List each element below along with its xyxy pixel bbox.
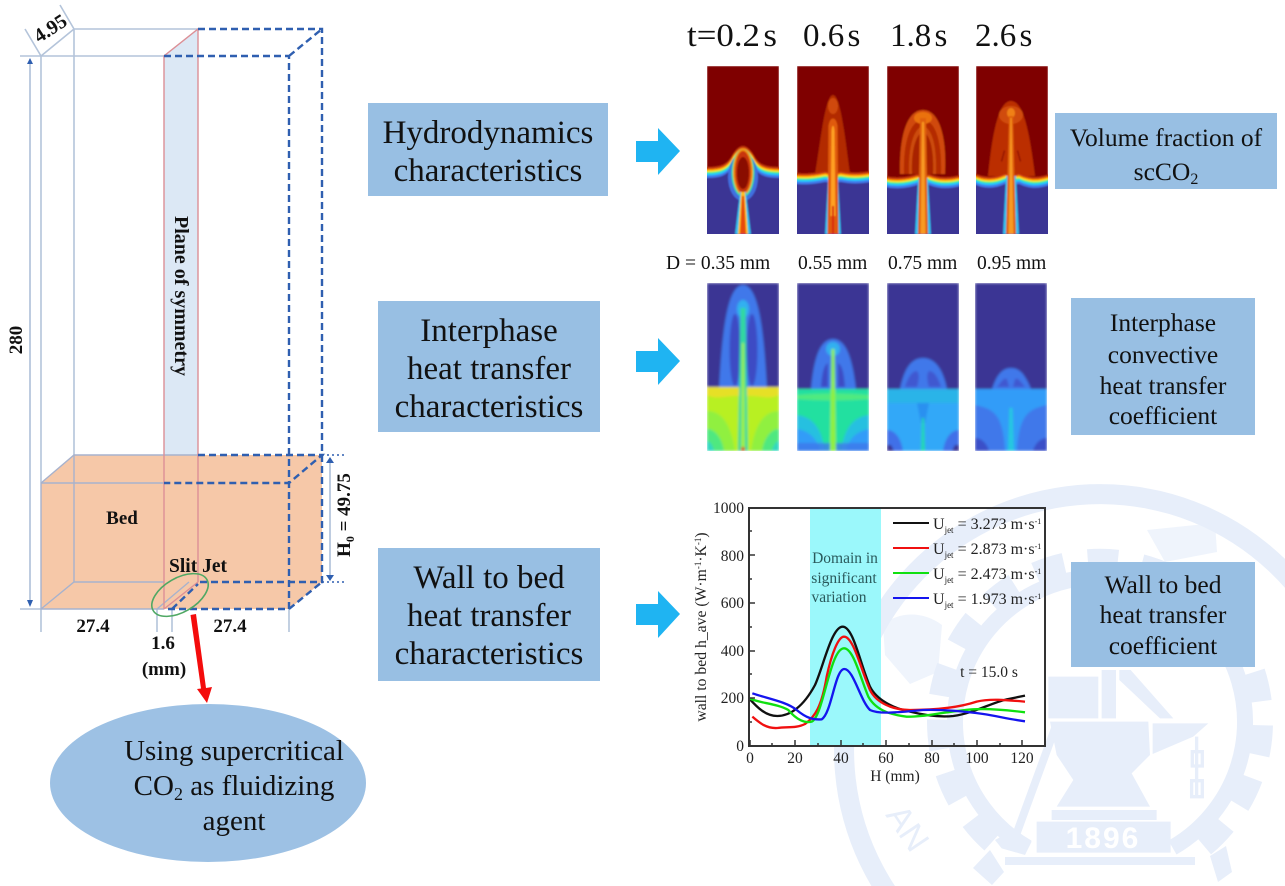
curves <box>749 627 1025 728</box>
axis labels: 1000 <box>713 500 744 517</box>
contour t=0.2 s <box>707 66 779 234</box>
dimension arrows <box>30 62 330 602</box>
heading: particle diameter labels <box>666 253 1046 274</box>
dimension labels: 0 <box>343 536 357 542</box>
domain annotation: variation <box>811 589 867 606</box>
axis labels: 80 <box>924 750 940 767</box>
axis labels: 400 <box>721 643 744 660</box>
legend <box>893 516 1041 610</box>
heading: time labels: t=0.2 s <box>687 18 777 54</box>
panel: volume fraction label <box>1055 113 1277 189</box>
panel: 3D fluidized bed geometry <box>6 5 357 680</box>
legend: = 2.873 m·s <box>954 541 1035 558</box>
axis labels: 200 <box>721 690 744 707</box>
axis labels: 0 <box>746 750 754 767</box>
legend: U <box>933 516 945 533</box>
legend: U <box>933 541 945 558</box>
contour D=0.75 mm <box>887 283 959 451</box>
heading: time labels <box>687 18 1032 54</box>
panel: Hydrodynamics characteristics: Hydrodynamics <box>383 115 593 151</box>
panel: Hydrodynamics characteristics <box>368 103 608 196</box>
axis labels: 800 <box>721 548 744 565</box>
red plane edges <box>164 29 198 609</box>
arrow: red to supercritical CO2 <box>190 614 212 703</box>
heading: particle diameter labels: 0.55 mm <box>798 253 867 274</box>
contour D=0.55 mm <box>797 283 869 451</box>
callout: supercritical CO2: CO <box>134 770 334 804</box>
watermark: university emblem: AN <box>878 798 936 859</box>
contour t=1.8 s <box>887 66 959 234</box>
dimension labels: 4.95 <box>30 10 71 48</box>
axis labels: 120 <box>1010 750 1034 767</box>
domain annotation: significant <box>811 570 877 587</box>
bed block <box>41 455 322 609</box>
legend: = 2.473 m·s <box>954 566 1035 583</box>
significant variation domain <box>810 508 881 746</box>
dimension labels <box>6 10 357 680</box>
panel: interphase coefficient label: Interphase <box>1110 308 1216 337</box>
axis labels: -1 <box>693 538 703 545</box>
light outline edges <box>20 5 289 632</box>
axis labels: 600 <box>721 595 744 612</box>
panel: interphase coefficient label: heat transfer <box>1100 371 1227 400</box>
axis labels: 20 <box>787 750 803 767</box>
watermark: university emblem: 1896 <box>1066 822 1140 855</box>
dimension labels: Plane of symmetry <box>170 216 192 376</box>
dimension labels: 27.4 <box>213 616 247 637</box>
panel: interphase coefficient label: convective <box>1108 340 1218 369</box>
panel: wall to bed coefficient label <box>1071 562 1255 667</box>
heading: particle diameter labels: 0.95 mm <box>977 253 1046 274</box>
axis labels: -1 <box>693 562 703 569</box>
dimension labels: 27.4 <box>76 616 110 637</box>
slit jet ring <box>145 565 215 625</box>
legend: -1 <box>1035 567 1041 576</box>
dimension labels: Slit Jet <box>169 556 227 577</box>
dimension labels: 1.6 <box>151 633 175 654</box>
contour D=0.95 mm <box>975 283 1047 451</box>
panel: Wall to bed heat transfer characteristics <box>378 548 600 681</box>
dashed blue half-box <box>164 29 322 609</box>
legend: -1 <box>1035 517 1041 526</box>
panel: volume fraction label: scCO <box>1134 157 1198 188</box>
dimension labels: (mm) <box>142 659 186 680</box>
axis labels: 40 <box>833 750 849 767</box>
dimension labels: = 49.75 <box>334 473 355 536</box>
axis labels: H (mm) <box>870 768 920 785</box>
chart: volume fraction contours <box>705 66 1050 247</box>
arrow: wall to bed <box>636 591 680 638</box>
callout: supercritical CO2 <box>50 704 366 862</box>
callout: supercritical CO2: as fluidizing <box>183 770 334 802</box>
panel: Interphase heat transfer characteristics: characteristics <box>395 389 583 425</box>
heading: time labels: 2.6 s <box>975 18 1032 54</box>
heading: particle diameter labels: D = 0.35 mm <box>666 253 770 274</box>
panel: wall to bed coefficient label: heat transfer <box>1100 600 1227 629</box>
callout: supercritical CO2: Using supercritical <box>124 735 344 767</box>
panel: Interphase heat transfer characteristics: Interphase <box>420 313 558 349</box>
panel: Interphase heat transfer characteristics: heat transfer <box>407 351 571 387</box>
symmetry plane fill <box>164 29 198 455</box>
panel: Wall to bed heat transfer characteristics: characteristics <box>395 636 583 672</box>
heading: time labels: 1.8 s <box>890 18 947 54</box>
panel: wall to bed coefficient label: Wall to bed <box>1105 570 1222 599</box>
axis labels <box>693 500 1034 785</box>
legend: U <box>933 591 945 608</box>
dimension labels: H <box>334 542 355 557</box>
legend: jet <box>944 600 954 610</box>
axis labels: ·K <box>693 544 710 562</box>
panel: Interphase heat transfer characteristics <box>378 301 600 432</box>
legend: -1 <box>1035 542 1041 551</box>
axis labels: 100 <box>965 750 989 767</box>
panel: volume fraction label: Volume fraction of <box>1070 123 1263 152</box>
chart: heat transfer coefficient contours <box>707 283 1047 451</box>
dimension labels: 280 <box>6 326 27 354</box>
legend: jet <box>944 525 954 535</box>
panel: wall to bed coefficient label: coefficient <box>1109 631 1217 660</box>
arrow: hydrodynamics <box>636 128 680 175</box>
callout: supercritical CO2: agent <box>203 805 265 837</box>
axis labels: ) <box>693 532 710 538</box>
contour D=0.35 mm <box>707 283 779 451</box>
panel: Wall to bed heat transfer characteristics: heat transfer <box>407 598 571 634</box>
watermark: university emblem <box>834 484 1285 886</box>
legend: U <box>933 566 945 583</box>
panel: interphase coefficient label: coefficient <box>1109 401 1217 430</box>
heading: time labels: 0.6 s <box>803 18 860 54</box>
time annotation: t = 15.0 s <box>960 664 1018 681</box>
axes frame and ticks <box>749 508 1045 746</box>
callout: supercritical CO2: 2 <box>174 784 183 804</box>
axis labels: 60 <box>878 750 894 767</box>
domain annotation: Domain in <box>812 550 878 567</box>
legend: -1 <box>1035 592 1041 601</box>
dimension labels: Bed <box>106 508 138 529</box>
contour t=0.6 s <box>797 66 869 234</box>
chart: wall to bed h_ave vs H <box>693 500 1045 785</box>
legend: jet <box>944 550 954 560</box>
panel: interphase coefficient label <box>1071 298 1255 435</box>
panel: Wall to bed heat transfer characteristics: Wall to bed <box>413 560 565 596</box>
axis labels: 0 <box>736 738 744 755</box>
arrow: interphase <box>636 338 680 385</box>
legend: jet <box>944 575 954 585</box>
panel: volume fraction label: 2 <box>1190 171 1198 188</box>
legend: = 3.273 m·s <box>954 516 1035 533</box>
axis labels: wall to bed h_ave (W·m <box>693 569 710 722</box>
panel: Hydrodynamics characteristics: characteristics <box>394 153 582 189</box>
contour t=2.6 s <box>976 66 1048 234</box>
legend: = 1.973 m·s <box>954 591 1035 608</box>
heading: particle diameter labels: 0.75 mm <box>888 253 957 274</box>
